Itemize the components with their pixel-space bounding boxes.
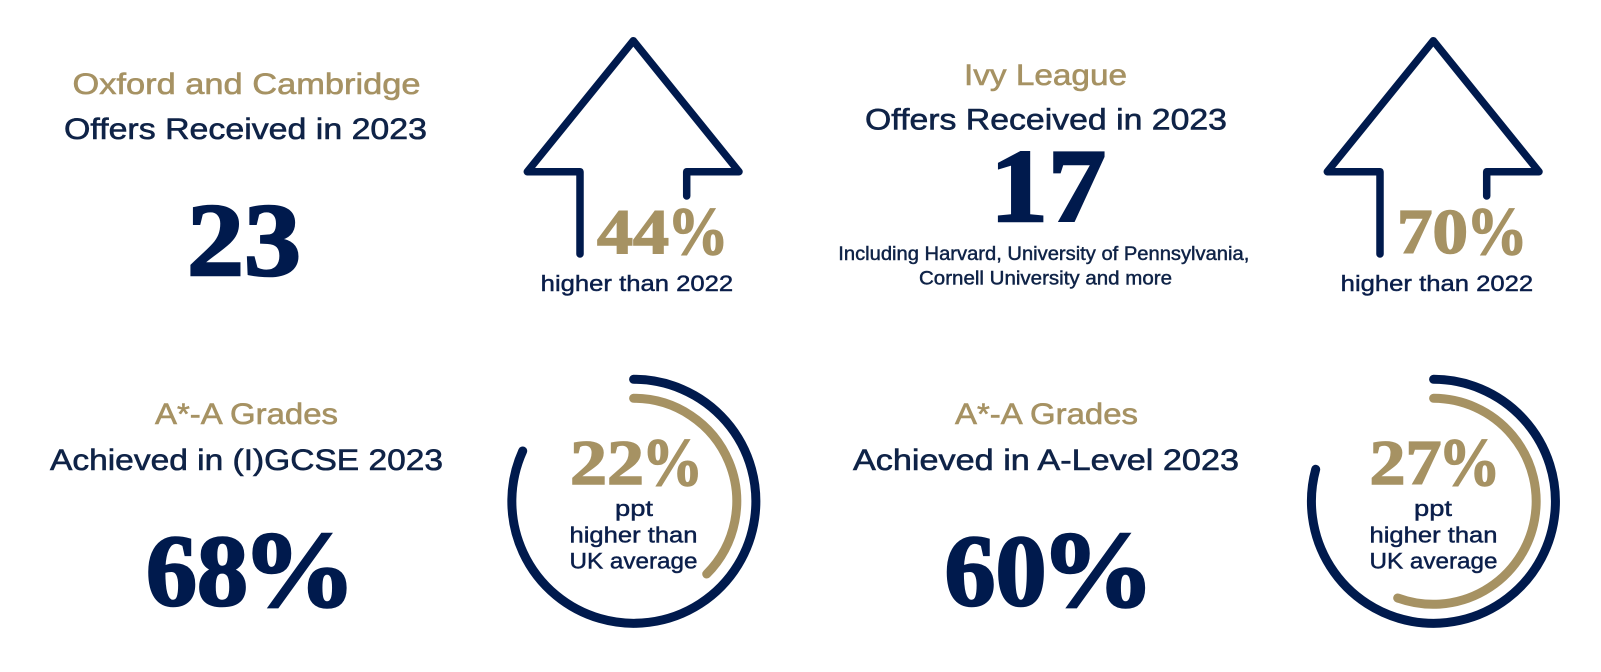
- subheading: achieved in A-Level: Achieved in A-Level 2023: [853, 444, 1239, 477]
- panel: A-Level grades: [853, 398, 1239, 630]
- stat: 44%: 44: [597, 196, 669, 267]
- stat: 70%: [1397, 193, 1528, 269]
- chart: gold ring: [634, 398, 737, 574]
- panel: Ivy League increase: [1327, 41, 1539, 296]
- chart: navy ring: [1311, 379, 1555, 623]
- caption: ppt: ppt: [1414, 496, 1452, 521]
- note: second line: Cornell University and more: [919, 268, 1172, 289]
- caption: UK average: UK average: [570, 548, 698, 573]
- big number: 68%: [146, 511, 356, 630]
- heading: A*-A Grades: A*-A Grades: [955, 398, 1138, 431]
- chart: navy ring: [512, 379, 756, 623]
- caption: higher than: higher than: [1370, 523, 1498, 548]
- stat: 27%: 27: [1370, 427, 1442, 498]
- panel: IGCSE grades: [50, 398, 443, 630]
- icon: up arrow outline: [527, 41, 739, 254]
- stat: 70%: 70: [1397, 196, 1468, 267]
- caption: ppt: ppt: [615, 496, 653, 521]
- caption: higher than 2022: higher than 2022: [541, 271, 733, 296]
- subheading: offers received: Offers Received in 2023: [64, 113, 427, 146]
- panel: IGCSE comparison ring: [512, 379, 756, 623]
- stat: 44%: [597, 193, 728, 269]
- chart: gold ring: [1398, 398, 1536, 604]
- big number: 60%: [944, 511, 1154, 630]
- panel: Oxford and Cambridge offers: [64, 68, 427, 298]
- subheading: offers received: Offers Received in 2023: [865, 104, 1227, 136]
- big number: 60%: 60: [944, 515, 1046, 628]
- big number: 17: 17: [990, 129, 1106, 244]
- stat: 22%: 22: [570, 427, 644, 498]
- panel: A-Level comparison ring: [1311, 379, 1555, 623]
- caption: higher than: higher than: [570, 523, 698, 548]
- big number: 68%: 68: [146, 515, 248, 628]
- heading: Oxford and Cambridge: Oxford and Cambridge: [72, 68, 420, 101]
- stat: 27%: %: [1438, 424, 1500, 500]
- panel: Ivy League offers: [838, 59, 1249, 289]
- big number: 60%: %: [1040, 511, 1154, 630]
- subheading: achieved in IGCSE: Achieved in (I)GCSE 2023: [50, 444, 443, 477]
- big number: 68%: %: [242, 511, 356, 630]
- icon: up arrow outline: [1327, 41, 1539, 254]
- heading: A*-A Grades: A*-A Grades: [155, 398, 338, 431]
- heading: Ivy League: Ivy League: [964, 59, 1127, 92]
- caption: higher than 2022: higher than 2022: [1341, 271, 1533, 296]
- stat: 22%: [570, 424, 703, 500]
- stat: 70%: %: [1466, 193, 1528, 269]
- note: university names: Including Harvard, University of Pennsylvania,: [838, 244, 1249, 265]
- panel: Oxford and Cambridge increase: [527, 41, 739, 296]
- caption: UK average: UK average: [1370, 548, 1498, 573]
- stat: 22%: %: [642, 424, 703, 500]
- stat: 27%: [1370, 424, 1500, 500]
- stat: 44%: %: [668, 193, 728, 269]
- big number: 23: 23: [187, 183, 301, 298]
